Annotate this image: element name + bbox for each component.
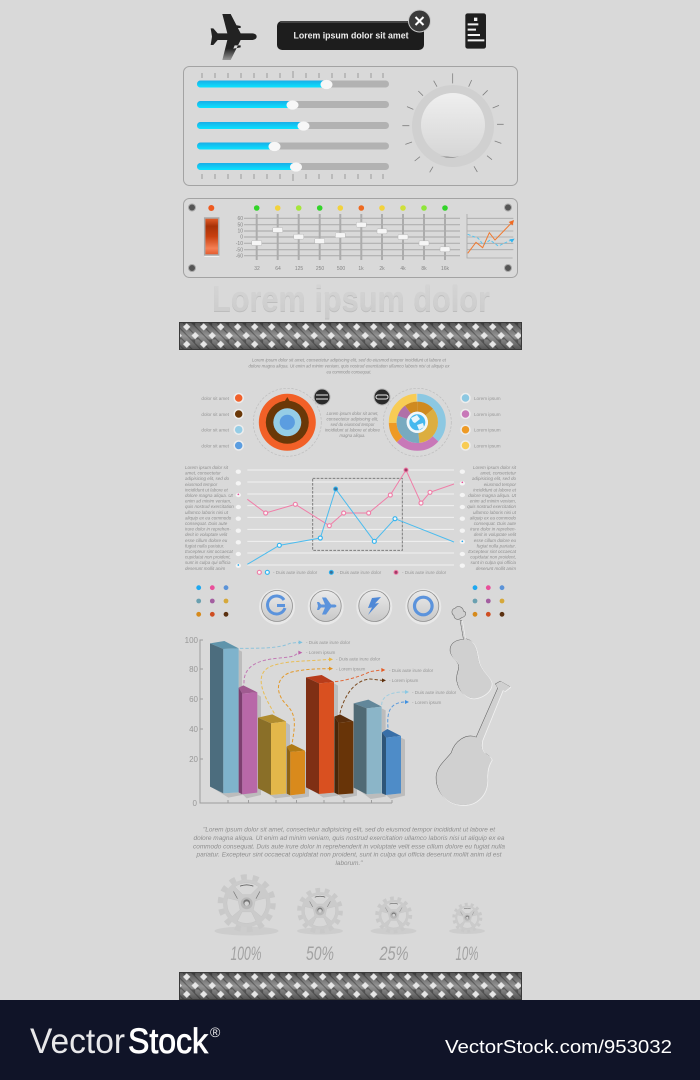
- text column: left: enim ad minim veniam,: [185, 499, 231, 504]
- text column: right: Excepteur sint occaecat: [468, 549, 517, 554]
- equalizer faders: [252, 214, 450, 260]
- donut chart: left: [253, 388, 321, 456]
- equalizer level labels: [236, 216, 243, 259]
- bar chart axes and labels: [185, 636, 392, 808]
- footer logo: [30, 1022, 221, 1061]
- text column: left: cupidatat non proident,: [185, 555, 231, 560]
- icon: airplane: [211, 14, 257, 60]
- icon: guitar: [436, 681, 510, 805]
- text column: right: esse cillum dolore eu: [474, 538, 516, 543]
- intro paragraph: Lorem ipsum dolor sit amet, consectetur adipiscing elit, sed do eiusmod tempor incididunt ut labore et: [252, 358, 447, 362]
- title: Lorem ipsum dolor: [212, 279, 490, 320]
- text column: right: incididunt ut labore et: [473, 487, 517, 492]
- icon: globe: [407, 412, 428, 433]
- woven band: top: [179, 322, 522, 350]
- power switch: [204, 205, 220, 257]
- text column: left: irure dolor in reprehen-: [185, 527, 231, 532]
- woven band: bottom: [179, 972, 522, 1000]
- legend: right donut: Lorem ipsum: [474, 444, 501, 448]
- slider 2: [197, 100, 389, 110]
- tooltip pill with close button: [277, 10, 430, 50]
- gear: 25%: [370, 899, 416, 965]
- bar chart 3D bars: [210, 641, 405, 799]
- legend: left donut: dolor sit amet: [201, 428, 230, 432]
- bar chart connector labels: - Duis aute irure dolor: [306, 640, 351, 645]
- text column: right: adipisicing elit, sed do: [472, 476, 516, 481]
- bar: purple: [239, 685, 257, 794]
- equalizer level labels: -10: [236, 241, 243, 247]
- bar chart connector labels: - Duis aute irure dolor: [336, 656, 381, 662]
- text column: left: ullamco laboris nisi ut: [185, 510, 229, 515]
- text column: left: Excepteur sint occaecat: [185, 549, 234, 554]
- text column: left: esse cillum dolore eu: [185, 538, 228, 543]
- frequency labels: 2k: [379, 266, 385, 272]
- frequency labels: 4k: [400, 266, 406, 272]
- equalizer level labels: 60: [237, 216, 243, 222]
- button: plane: [308, 589, 344, 625]
- text column: left: derit in voluptate velit: [185, 532, 228, 537]
- center text: magna aliqua.: [340, 433, 366, 438]
- icon: left badge: [314, 389, 330, 405]
- panel: sliders and dial: [184, 66, 518, 186]
- text column: right: aliquip ex ea commodo: [470, 515, 516, 520]
- legend: left donut: dolor sit amet: [201, 412, 230, 417]
- frequency labels: 250: [316, 266, 324, 272]
- panel: equalizer: [184, 198, 518, 278]
- line chart legend: - Duis aute irure dolor: [337, 570, 382, 575]
- bar chart connector labels: - Duis aute irure dolor: [412, 690, 457, 695]
- bar chart axes and labels: 40: [189, 725, 199, 734]
- text column: right: eiusmod tempor: [484, 482, 517, 487]
- frequency labels: 64: [275, 266, 281, 272]
- text column: left: adipisicing elit, sed do: [185, 476, 230, 481]
- icon: right badge: [374, 389, 390, 405]
- bar: orange: [287, 744, 305, 795]
- tooltip text: Lorem ipsum dolor sit amet: [294, 30, 408, 40]
- button: ring: [405, 589, 441, 625]
- frequency labels: 1k: [358, 266, 364, 272]
- legend: right donut: Lorem ipsum: [474, 412, 501, 417]
- line chart legend: [273, 570, 447, 575]
- icon: close: [408, 10, 430, 32]
- text column: left: quis nostrud exercitation: [185, 504, 234, 509]
- slider 5: [197, 162, 389, 172]
- intro paragraph: dolore magna aliqua. Ut enim ad minim veniam, quis nostrud exercitation ullamco laboris nisi ut aliquip ex: [248, 364, 450, 368]
- text column: left: Lorem ipsum dolor sit: [185, 465, 229, 470]
- equalizer level labels: -50: [236, 247, 243, 253]
- text column: right: consequat. Duis aute: [474, 521, 516, 526]
- center text: [325, 411, 380, 438]
- bar: brown: [334, 714, 353, 795]
- intro paragraph: ea commodo consequat.: [326, 370, 372, 374]
- dial: [402, 73, 504, 172]
- bar chart connector labels: [306, 640, 457, 705]
- bar chart axes and labels: 0: [193, 799, 198, 808]
- title: Lorem ipsum dolor: [212, 278, 490, 319]
- equalizer LEDs: [254, 205, 448, 211]
- text column: left: consequat. Duis aute: [185, 521, 228, 526]
- bar chart axes and labels: 80: [189, 665, 199, 674]
- footer url: VectorStock.com/953032: [445, 1037, 672, 1057]
- frequency labels: 16k: [441, 266, 450, 272]
- center text: consectetur adipiscing elit,: [326, 416, 378, 422]
- legend: right donut: [461, 394, 501, 450]
- equalizer level labels: -60: [236, 253, 243, 259]
- legend: left donut: dolor sit amet: [201, 396, 230, 401]
- icon: document: [465, 13, 486, 49]
- text column: right: derit in voluptate velit: [474, 532, 517, 537]
- icon: violin: [450, 607, 492, 699]
- quote paragraph: [193, 826, 505, 867]
- legend: left donut: dolor sit amet: [201, 444, 230, 448]
- footer bar: [0, 1000, 700, 1080]
- button: power: [259, 589, 295, 625]
- text column: right: amet, consectetur: [480, 471, 516, 476]
- mini line chart: [467, 214, 515, 258]
- bar: red: [306, 675, 334, 794]
- center text: incididunt ut labore et dolore: [325, 428, 380, 432]
- text column: right: quis nostrud exercitation: [467, 504, 516, 509]
- quote paragraph: pariatur. Excepteur sint occaecat cupidatat non proident, sunt in culpa qui officia deserunt mollit anim id est: [196, 852, 503, 859]
- text column: right: dolore magna aliqua. Ut: [468, 493, 517, 498]
- text column: left: incididunt ut labore et: [185, 487, 229, 492]
- slider 3: [197, 121, 389, 131]
- slider 1: [197, 80, 389, 89]
- equalizer level labels: 10: [237, 229, 243, 235]
- text column: left: fugiat nulla pariatur.: [185, 543, 224, 548]
- quote paragraph: commodo consequat. Duis aute irure dolor in reprehenderit in voluptate velit esse cillum dolore eu fugiat nulla: [193, 843, 505, 850]
- legend: right donut: Lorem ipsum: [474, 428, 501, 432]
- text column: right: enim ad minim veniam,: [470, 499, 516, 504]
- bar chart connector arrows: [240, 640, 409, 742]
- line chart legend: - Duis aute irure dolor: [273, 570, 318, 575]
- quote paragraph: laborum.": [336, 860, 363, 867]
- text column: right: ullamco laboris nisi ut: [473, 510, 517, 515]
- equalizer grid lines: [244, 218, 460, 256]
- quote paragraph: "Lorem ipsum dolor sit amet, consectetur adipisicing elit, sed do eiusmod tempor incididunt ut labore et: [203, 826, 496, 834]
- text column: left: dolore magna aliqua. Ut: [185, 493, 234, 498]
- label: 10%: 10%: [456, 944, 479, 965]
- footer logo: Stock: [128, 1022, 208, 1061]
- corner screws: [188, 204, 512, 272]
- center text: sed do eiusmod tempor: [330, 422, 375, 427]
- equalizer level labels: 50: [237, 222, 243, 228]
- footer logo: ®: [210, 1024, 221, 1040]
- frequency labels: 32: [254, 266, 260, 272]
- label: 100%: 100%: [230, 944, 262, 965]
- text column: right: sunt in culpa qui officia: [470, 560, 516, 565]
- text column: right: [467, 465, 517, 571]
- bar: light blue tall: [210, 641, 239, 793]
- bar: yellow: [258, 714, 286, 795]
- legend: left donut: [201, 394, 243, 450]
- text column: left: deserunt mollit anim: [185, 566, 226, 571]
- gear: 50%: [297, 891, 343, 965]
- bar: blue: [382, 729, 401, 795]
- text column: right: Lorem ipsum dolor sit: [473, 465, 517, 470]
- bar chart axes and labels: 20: [189, 755, 199, 764]
- slider 4: [197, 142, 389, 151]
- intro paragraph: [248, 358, 450, 374]
- text column: left: eiusmod tempor: [185, 482, 218, 487]
- gear: 100%: [214, 878, 278, 965]
- equalizer level labels: 0: [240, 235, 243, 241]
- bar chart connector labels: - Lorem ipsum: [412, 700, 442, 705]
- bar shadows: [213, 650, 405, 799]
- text column: left: sunt in culpa qui officia: [185, 560, 231, 565]
- color dots: right: [473, 585, 504, 617]
- text column: right: deserunt mollit anim: [476, 566, 516, 571]
- bar chart connector labels: - Lorem ipsum: [389, 678, 419, 683]
- bar chart connector labels: - Duis aute irure dolor: [389, 668, 434, 673]
- frequency labels: [254, 266, 450, 272]
- gear: 10%: [449, 905, 485, 965]
- text column: left: aliquip ex ea commodo: [185, 515, 232, 520]
- slider ticks: [202, 71, 383, 181]
- center text: Lorem ipsum dolor sit amet,: [326, 411, 378, 416]
- bar: teal: [354, 700, 382, 794]
- frequency labels: 500: [337, 266, 345, 272]
- bar chart axes and labels: 100: [185, 636, 199, 645]
- text column: right: irure dolor in reprehen-: [470, 527, 516, 532]
- bar chart connector labels: - Lorem ipsum: [306, 650, 336, 655]
- donut chart: right: [383, 388, 451, 456]
- bar chart axes and labels: 60: [189, 695, 199, 704]
- footer logo: Vector: [30, 1022, 125, 1061]
- line chart legend: - Duis aute irure dolor: [402, 570, 447, 575]
- color dots: left: [196, 585, 228, 617]
- frequency labels: 125: [295, 266, 303, 272]
- line chart: [236, 468, 465, 574]
- text column: left: amet, consectetur: [185, 471, 221, 476]
- frequency labels: 8k: [421, 266, 427, 272]
- legend: right donut: Lorem ipsum: [474, 396, 501, 401]
- label: 25%: 25%: [379, 944, 409, 965]
- bar chart connector labels: - Lorem ipsum: [336, 666, 366, 672]
- button: lightning: [356, 589, 392, 625]
- label: 50%: 50%: [306, 944, 334, 965]
- text column: right: fugiat nulla pariatur.: [477, 543, 516, 548]
- text column: right: cupidatat non proident,: [470, 555, 516, 560]
- quote paragraph: dolore magna aliqua. Ut enim ad minim veniam, quis nostrud exercitation ullamco laboris nisi ut aliquip ex ea: [194, 835, 505, 842]
- text column: left: [185, 465, 234, 571]
